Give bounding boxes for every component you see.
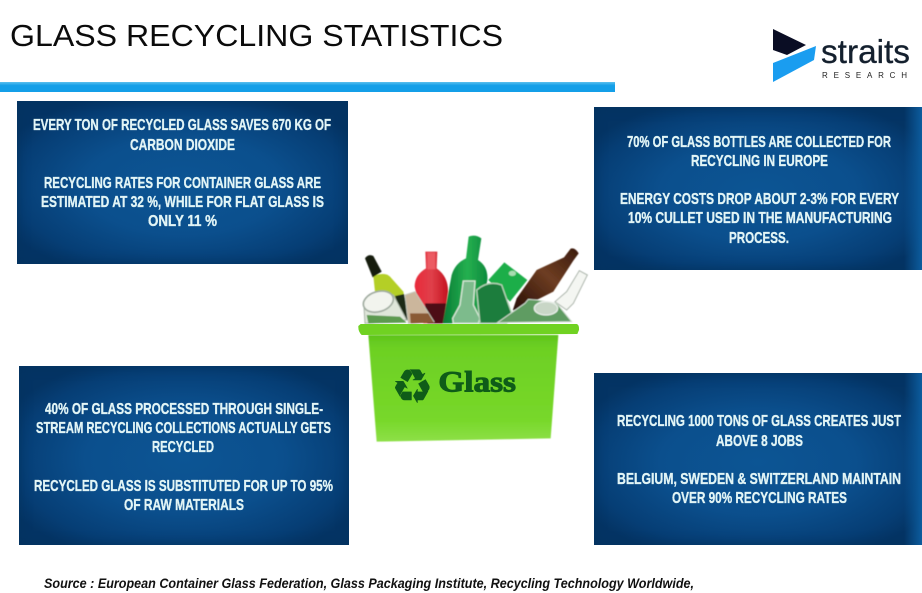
clear bottle [555, 271, 587, 310]
right edge highlight [904, 373, 922, 545]
square green bottle [488, 262, 527, 302]
brown bottle [513, 248, 579, 311]
logo icon [773, 29, 816, 82]
front lying bottle [497, 299, 572, 323]
panel: carbon savings and recycling rates: CARBON DIOXIDE [130, 137, 235, 154]
panel: European collection and energy costs: PROCESS. [729, 230, 789, 247]
panel: European collection and energy costs: RECYCLING IN EUROPE [691, 153, 828, 170]
logo wordmark: straits [821, 33, 910, 70]
logo wordmark: RESEARCH [822, 71, 907, 80]
bottles and jars [361, 236, 587, 323]
panel: jobs and national recycling rates: OVER 90% RECYCLING RATES [672, 490, 847, 507]
recycling symbol: ♻ [391, 361, 433, 415]
title: GLASS RECYCLING STATISTICS [10, 18, 503, 53]
bin label: Glass [438, 367, 516, 399]
panel: carbon savings and recycling rates: ONLY 11 % [148, 213, 217, 230]
round jar left [361, 288, 407, 323]
illustration: green glass recycling bin with bottles [358, 234, 588, 442]
panel: jobs and national recycling rates: ABOVE 8 JOBS [716, 433, 803, 450]
green jar [477, 283, 512, 323]
bin rim [358, 324, 579, 335]
header accent bar [0, 82, 615, 92]
panel: carbon savings and recycling rates [17, 101, 348, 264]
panel: European collection and energy costs [594, 107, 922, 270]
panel: single-stream processing and raw materials: OF RAW MATERIALS [124, 497, 244, 514]
red bottle [415, 252, 448, 323]
panel: single-stream processing and raw materials: RECYCLED [152, 439, 214, 456]
small jar [405, 292, 434, 323]
panel: single-stream processing and raw materials [19, 366, 349, 545]
upright clear bottle [453, 281, 480, 323]
panel: jobs and national recycling rates [594, 373, 922, 545]
front jar rim [534, 302, 558, 315]
right edge highlight [904, 107, 922, 270]
wine bottle [365, 255, 409, 322]
green bottle [443, 236, 487, 323]
logo: Straits Research [773, 29, 910, 82]
bin body [368, 335, 558, 442]
